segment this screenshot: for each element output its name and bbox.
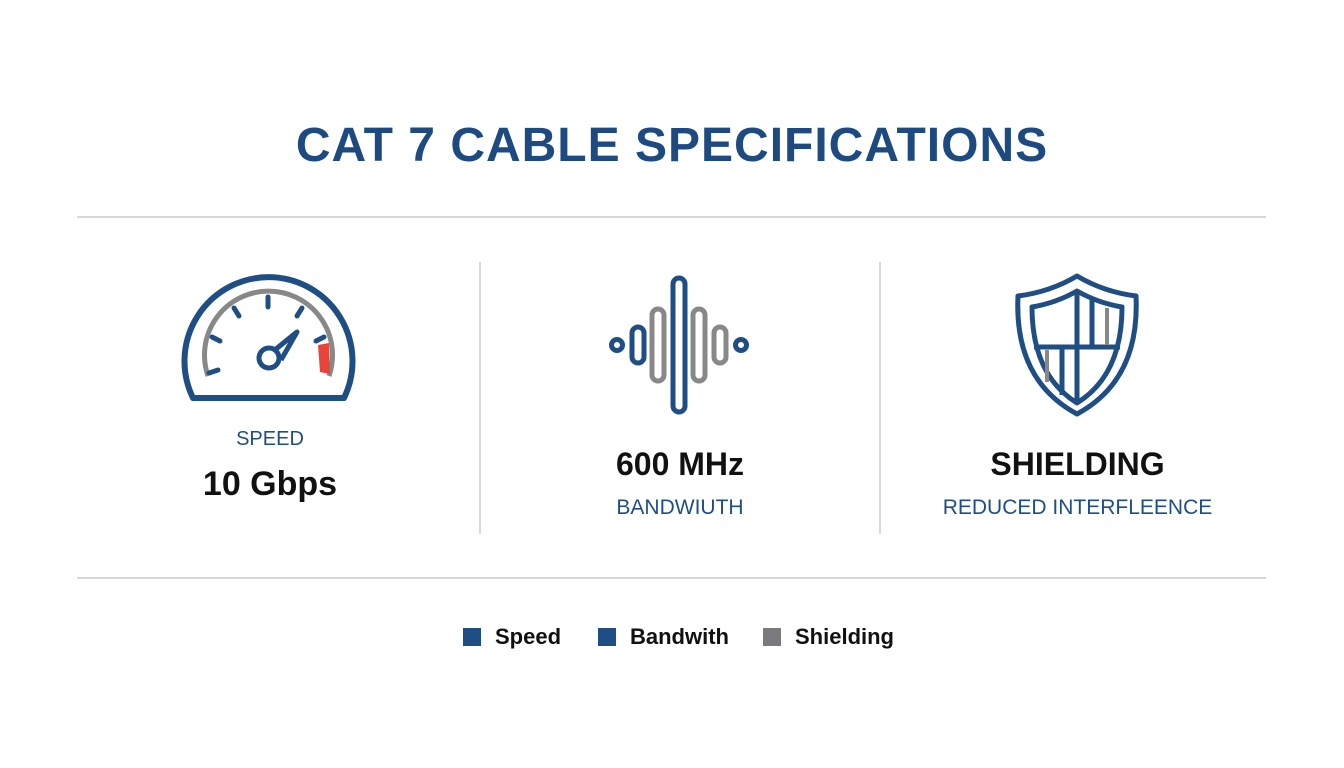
value: 10 Gbps: 10 Gbps <box>203 465 337 503</box>
panel: bandwidth <box>609 276 749 519</box>
icon: waveform <box>609 276 749 414</box>
legend <box>463 624 894 649</box>
label: bandwidth: BANDWIUTH <box>616 496 744 519</box>
legend item: speed: Speed <box>495 624 561 649</box>
legend item: bandwith: Bandwith <box>630 624 729 649</box>
panel: speed <box>182 274 356 503</box>
panel: shielding <box>943 274 1212 519</box>
icon: shield <box>1015 274 1139 416</box>
title: CAT 7 CABLE SPECIFICATIONS <box>296 119 1048 172</box>
legend item: speed <box>463 624 561 649</box>
legend item: shielding: Shielding <box>795 624 894 649</box>
value: shielding: SHIELDING <box>990 446 1165 482</box>
icon: speedometer <box>182 274 356 401</box>
label: reduced interference: REDUCED INTERFLEENCE <box>943 496 1212 519</box>
value: 600 MHz: 600 MHz <box>616 446 744 482</box>
label: speed: SPEED <box>236 428 304 450</box>
